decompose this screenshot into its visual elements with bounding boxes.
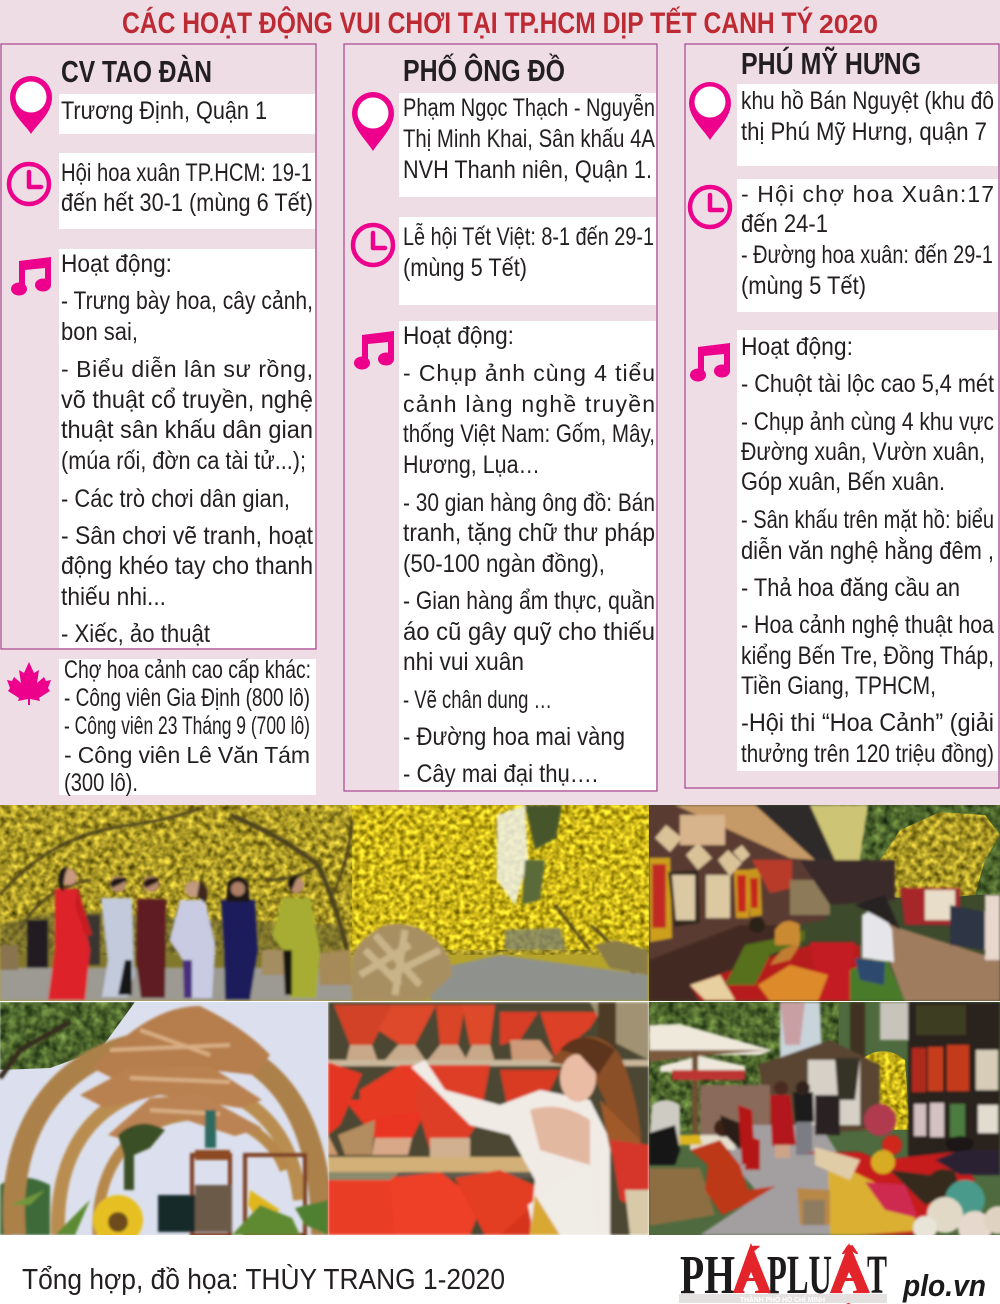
activities text: động khéo tay cho thanh bbox=[61, 552, 313, 580]
activities text: Hương, Lụa… bbox=[403, 451, 540, 479]
dates text: - Hội chợ hoa Xuân:17 bbox=[741, 181, 994, 207]
icon: music note bbox=[354, 331, 394, 370]
sign and frames bbox=[815, 1095, 840, 1135]
address text bbox=[741, 87, 994, 146]
thatch and post bbox=[590, 1002, 649, 1060]
activities text: - Xiếc, ảo thuật bbox=[61, 620, 210, 648]
dates text: Hội hoa xuân TP.HCM: 19-1 bbox=[61, 159, 312, 187]
flowers and red lion bbox=[864, 1104, 896, 1136]
logo: Pháp Luật: Ậ bbox=[832, 1244, 868, 1304]
road bbox=[0, 968, 352, 1001]
market list text: - Công viên 23 Tháng 9 (700 lô) bbox=[64, 712, 310, 740]
visitors bbox=[862, 905, 894, 962]
wooden stool bbox=[797, 1188, 830, 1225]
photo: calligraphy stall street bbox=[649, 805, 1000, 1001]
market list text: - Công viên Gia Định (800 lô) bbox=[64, 684, 310, 712]
market list text bbox=[64, 656, 311, 797]
burlap bundle bbox=[352, 924, 452, 1001]
dates text bbox=[61, 159, 313, 217]
table and paper bbox=[690, 945, 860, 1001]
panel: Phố Ông Đồ bbox=[344, 44, 657, 791]
activities text: thuật sân khấu dân gian bbox=[61, 416, 313, 444]
address text bbox=[403, 93, 655, 184]
shadowy band behind the women bbox=[0, 912, 345, 975]
activities text: - Đường hoa mai vàng bbox=[403, 723, 625, 751]
tree and truck bbox=[118, 1124, 165, 1190]
logo: plo.vn: plo.vn bbox=[902, 1268, 986, 1303]
activities text: - Thả hoa đăng cầu an bbox=[741, 574, 960, 602]
scaffold bbox=[192, 1155, 305, 1235]
panel: other flower markets bbox=[7, 656, 316, 797]
icon: location pin bbox=[689, 82, 731, 140]
logo: Pháp Luật: T bbox=[867, 1244, 887, 1304]
background people bbox=[27, 920, 48, 968]
activities text: thiếu nhi... bbox=[61, 583, 166, 611]
pink header and panels background bbox=[0, 0, 1000, 805]
activities text: áo cũ gây quỹ cho thiếu bbox=[403, 618, 655, 646]
heading: Phố Ông Đồ: PHỐ ÔNG ĐỒ bbox=[403, 52, 565, 88]
branches bbox=[0, 808, 635, 975]
market list text: Chợ hoa cảnh cao cấp khác: bbox=[64, 656, 311, 684]
activities text: - Trưng bày hoa, cây cảnh, bbox=[61, 287, 313, 315]
activities text bbox=[61, 250, 313, 648]
photo: bamboo arch with rice sheaves bbox=[0, 1002, 328, 1245]
painted plates bbox=[945, 1180, 985, 1220]
panel: CV Tao Đàn bbox=[1, 44, 316, 649]
activities text: Hoạt động: bbox=[403, 322, 514, 350]
woman in red and burlap table bbox=[649, 1105, 776, 1225]
activities text: - Sân chơi vẽ tranh, hoạt bbox=[61, 522, 313, 550]
sunflowers and leaves bbox=[11, 1188, 328, 1235]
activities text: Tiền Giang, TPHCM, bbox=[741, 672, 936, 700]
dates text bbox=[403, 222, 654, 282]
activities text: Góp xuân, Bến xuân. bbox=[741, 468, 945, 496]
activities text: - Chụp ảnh cùng 4 tiểu bbox=[403, 360, 655, 386]
people bbox=[649, 1081, 814, 1165]
framed calligraphy bbox=[649, 858, 672, 942]
dates text: (mùng 5 Tết) bbox=[403, 254, 527, 282]
activities text: Hoạt động: bbox=[61, 250, 172, 278]
activities text: Hoạt động: bbox=[741, 333, 853, 361]
title: 2020 bbox=[819, 9, 878, 39]
turf and path bbox=[850, 955, 905, 1001]
address text: Phạm Ngọc Thạch - Nguyễn bbox=[403, 93, 655, 122]
man writing calligraphy bbox=[935, 1150, 1000, 1175]
activities text: - 30 gian hàng ông đồ: Bán bbox=[403, 489, 655, 517]
dates text: (mùng 5 Tết) bbox=[741, 272, 866, 300]
activities text: - Cây mai đại thụ…. bbox=[403, 760, 598, 788]
middle row bbox=[328, 1062, 560, 1157]
activities text: (50-100 ngàn đồng), bbox=[403, 550, 605, 578]
woman in white ao dai bbox=[411, 1037, 649, 1235]
arch rings bbox=[14, 1040, 322, 1235]
activities text bbox=[403, 322, 655, 788]
roof thatch bbox=[675, 805, 815, 860]
logo: Pháp Luật: Á bbox=[734, 1244, 770, 1304]
icon: clock bbox=[353, 225, 393, 265]
icon: location pin bbox=[10, 76, 52, 134]
activities text: nhi vui xuân bbox=[403, 648, 524, 676]
activities text: (múa rối, đờn ca tài tử...); bbox=[61, 447, 306, 475]
market list text: - Công viên Lê Văn Tám bbox=[64, 742, 310, 768]
address text: NVH Thanh niên, Quận 1. bbox=[403, 156, 652, 184]
activities text: - Biểu diễn lân sư rồng, bbox=[61, 356, 313, 382]
lower row bbox=[328, 1170, 560, 1235]
activities text: - Vẽ chân dung … bbox=[403, 686, 552, 714]
title: CÁC HOẠT ĐỘNG VUI CHƠI TẠI TP.HCM DỊP TẾT CANH TÝ bbox=[122, 6, 813, 40]
activities text: võ thuật cổ truyền, nghệ bbox=[61, 386, 313, 414]
icon: music note bbox=[690, 343, 730, 382]
activities text: tranh, tặng chữ thư pháp bbox=[403, 519, 655, 547]
sacks bbox=[318, 950, 352, 985]
address text: Trương Định, Quận 1 bbox=[61, 97, 267, 125]
icon: clock bbox=[9, 164, 49, 204]
decorated tables bbox=[805, 1104, 1000, 1245]
photo: Tet street stalls with umbrella bbox=[649, 1002, 1000, 1245]
activities text bbox=[741, 333, 994, 768]
activities text: cảnh làng nghề truyền bbox=[403, 391, 655, 417]
icon: maple leaf bbox=[7, 662, 51, 705]
icon: music note bbox=[11, 257, 51, 296]
logo: Pháp Luật: THÀNH PHỐ HỒ CHÍ MINH bbox=[740, 1294, 825, 1304]
icon: clock bbox=[690, 187, 730, 227]
activities text: - Gian hàng ẩm thực, quần bbox=[403, 587, 655, 615]
address text: Thị Minh Khai, Sân khấu 4A bbox=[403, 125, 655, 153]
upper row bbox=[332, 1002, 600, 1062]
heading: CV Tao Đàn: CV TAO ĐÀN bbox=[61, 54, 212, 89]
dates text: đến hết 30-1 (mùng 6 Tết) bbox=[61, 189, 313, 217]
umbrella bbox=[649, 1024, 772, 1055]
photo: red incense bundles with woman in white ao dai bbox=[328, 1002, 649, 1235]
activities text: - Các trò chơi dân gian, bbox=[61, 485, 290, 513]
logo: Pháp Luật: PH bbox=[680, 1244, 735, 1304]
dates text: Lễ hội Tết Việt: 8-1 đến 29-1 bbox=[403, 222, 654, 251]
dates text bbox=[741, 181, 994, 300]
man in green bbox=[725, 930, 805, 985]
photo: yellow apricot blossom avenue with women in ao dai bbox=[0, 805, 649, 1001]
activities text: bon sai, bbox=[61, 318, 138, 346]
black framed calligraphy wall bbox=[908, 1002, 1000, 1172]
sky and distant tree bbox=[497, 805, 528, 905]
pavement bbox=[700, 1123, 838, 1235]
brick wall bbox=[649, 805, 826, 960]
stalls and bike bbox=[900, 888, 960, 925]
women bbox=[48, 866, 320, 1000]
dates text: đến 24-1 bbox=[741, 210, 828, 238]
stall hut bbox=[758, 1040, 880, 1135]
logo: Pháp Luật bbox=[679, 1243, 887, 1304]
panel: Phú Mỹ Hưng bbox=[685, 44, 999, 788]
market list text: (300 lô). bbox=[64, 769, 138, 797]
icon: location pin bbox=[352, 92, 394, 151]
activities text: thống Việt Nam: Gốm, Mây, bbox=[403, 420, 655, 448]
rice sheaf bbox=[92, 1006, 270, 1082]
heading: Phú Mỹ Hưng: PHÚ MỸ HƯNG bbox=[741, 45, 921, 81]
footer credit: Tổng hợp, đồ họa: THÙY TRANG 1-2020 bbox=[22, 1263, 505, 1296]
logo: Pháp Luật: PLU bbox=[767, 1244, 832, 1304]
